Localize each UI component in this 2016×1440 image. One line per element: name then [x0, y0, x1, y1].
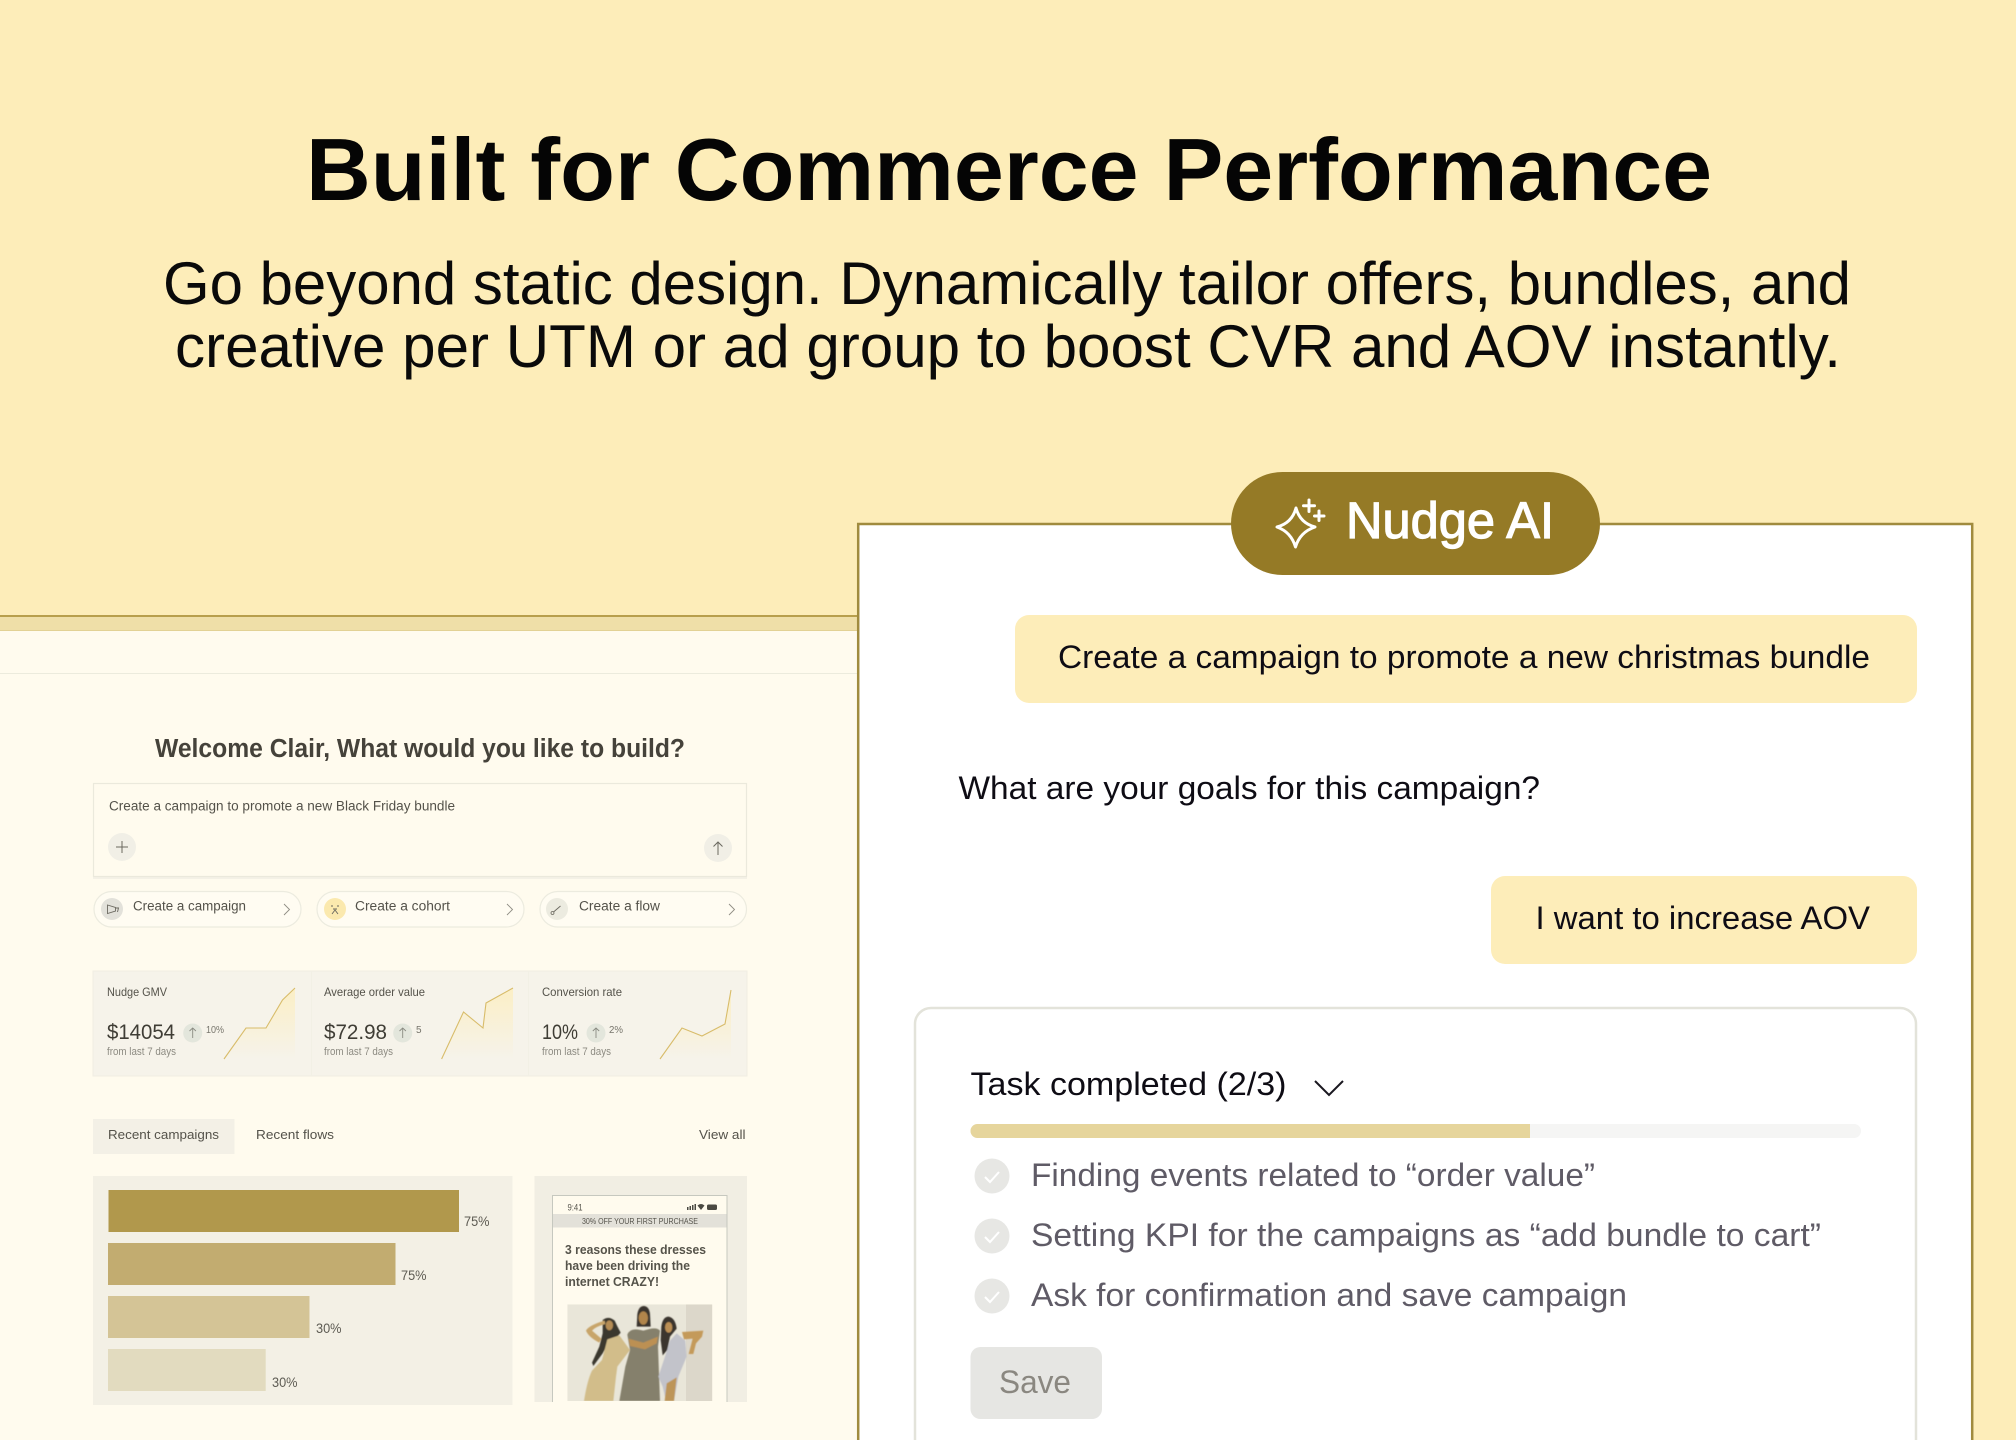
task card — [915, 1008, 1916, 1440]
stat: Conversion rate: from last 7 days — [542, 1046, 611, 1058]
chip: create a flow: Create a flow — [579, 898, 660, 914]
bar chart — [93, 1176, 512, 1405]
woman right — [661, 1317, 677, 1355]
icon: phone status — [687, 1204, 717, 1210]
user message: goal — [1491, 876, 1917, 964]
panel: Nudge AI chat — [858, 472, 1972, 1440]
stat: Conversion rate: 10% — [542, 1020, 578, 1044]
bar chart: 30% — [272, 1374, 298, 1390]
stats panel — [93, 971, 747, 1076]
subtitle — [163, 250, 1851, 380]
checklist: Setting KPI for the campaigns as “add bundle to cart” — [1031, 1217, 1821, 1253]
title: Built for Commerce Performance — [306, 120, 1712, 219]
subtitle: Go beyond static design. Dynamically tailor offers, bundles, and — [163, 250, 1851, 317]
phone preview card — [534, 1176, 747, 1402]
stat: Nudge GMV — [107, 985, 295, 1059]
icon: sparkle — [1277, 500, 1324, 547]
stat: Average order value — [324, 985, 513, 1059]
email headline — [565, 1243, 706, 1289]
checklist: Ask for confirmation and save campaign — [1031, 1277, 1627, 1313]
email headline: internet CRAZY! — [565, 1275, 659, 1289]
chip: create a campaign — [94, 892, 301, 927]
stat: Nudge GMV: 10% — [206, 1025, 224, 1036]
save button — [970, 1347, 1102, 1419]
progress bar — [970, 1124, 1861, 1138]
woman middle — [637, 1306, 651, 1327]
Nudge AI badge: Nudge AI — [1346, 492, 1554, 549]
tabs row: Recent flows — [256, 1127, 335, 1142]
stat: Average order value: $72.98 — [324, 1020, 387, 1044]
icon: chevron — [1315, 1081, 1343, 1095]
Nudge AI badge — [1231, 472, 1600, 575]
tabs row: View all — [699, 1127, 746, 1142]
stat: Average order value: 5 — [416, 1025, 422, 1036]
chip: create a cohort: Create a cohort — [355, 898, 450, 914]
checklist: Finding events related to “order value” — [1031, 1157, 1595, 1193]
email headline: 3 reasons these dresses — [565, 1243, 706, 1257]
task heading: Task completed (2/3) — [970, 1066, 1286, 1102]
stat: Average order value: Average order value — [324, 985, 425, 999]
subtitle: creative per UTM or ad group to boost CVR and AOV instantly. — [175, 313, 1841, 380]
bar chart: 75% — [464, 1213, 490, 1229]
tabs row: Recent campaigns — [108, 1127, 220, 1142]
save button: Save — [999, 1364, 1071, 1400]
prompt input box — [93, 784, 747, 879]
stat: Conversion rate — [542, 985, 731, 1059]
dashboard heading: Welcome Clair, What would you like to build? — [155, 735, 685, 763]
stat: Nudge GMV: Nudge GMV — [107, 985, 167, 999]
chip: create a cohort — [317, 892, 524, 927]
chip: create a campaign: Create a campaign — [133, 898, 246, 914]
tabs row — [93, 1119, 746, 1154]
assistant message: What are your goals for this campaign? — [958, 770, 1540, 806]
prompt input box: Create a campaign to promote a new Black Friday bundle — [109, 798, 455, 814]
bar chart: 75% — [401, 1267, 426, 1283]
stat: Conversion rate: Conversion rate — [542, 985, 622, 999]
phone preview card: 30% OFF YOUR FIRST PURCHASE — [582, 1217, 698, 1226]
bar chart: 30% — [316, 1320, 342, 1336]
user message: campaign request — [1015, 615, 1917, 703]
phone preview card: 9:41 — [568, 1202, 582, 1212]
user message: campaign request: Create a campaign to promote a new christmas bundle — [1058, 639, 1870, 675]
stat: Nudge GMV: from last 7 days — [107, 1046, 176, 1058]
panel: dashboard — [0, 615, 858, 1440]
photo: three women — [567, 1304, 712, 1401]
email headline: have been driving the — [565, 1259, 690, 1273]
chip: create a flow — [540, 892, 746, 927]
woman left: hair — [592, 1318, 621, 1366]
stat: Average order value: from last 7 days — [324, 1046, 393, 1058]
stat: Nudge GMV: $14054 — [107, 1020, 175, 1044]
stat: Conversion rate: 2% — [609, 1025, 623, 1036]
user message: goal: I want to increase AOV — [1536, 900, 1870, 936]
checklist — [974, 1157, 1821, 1314]
